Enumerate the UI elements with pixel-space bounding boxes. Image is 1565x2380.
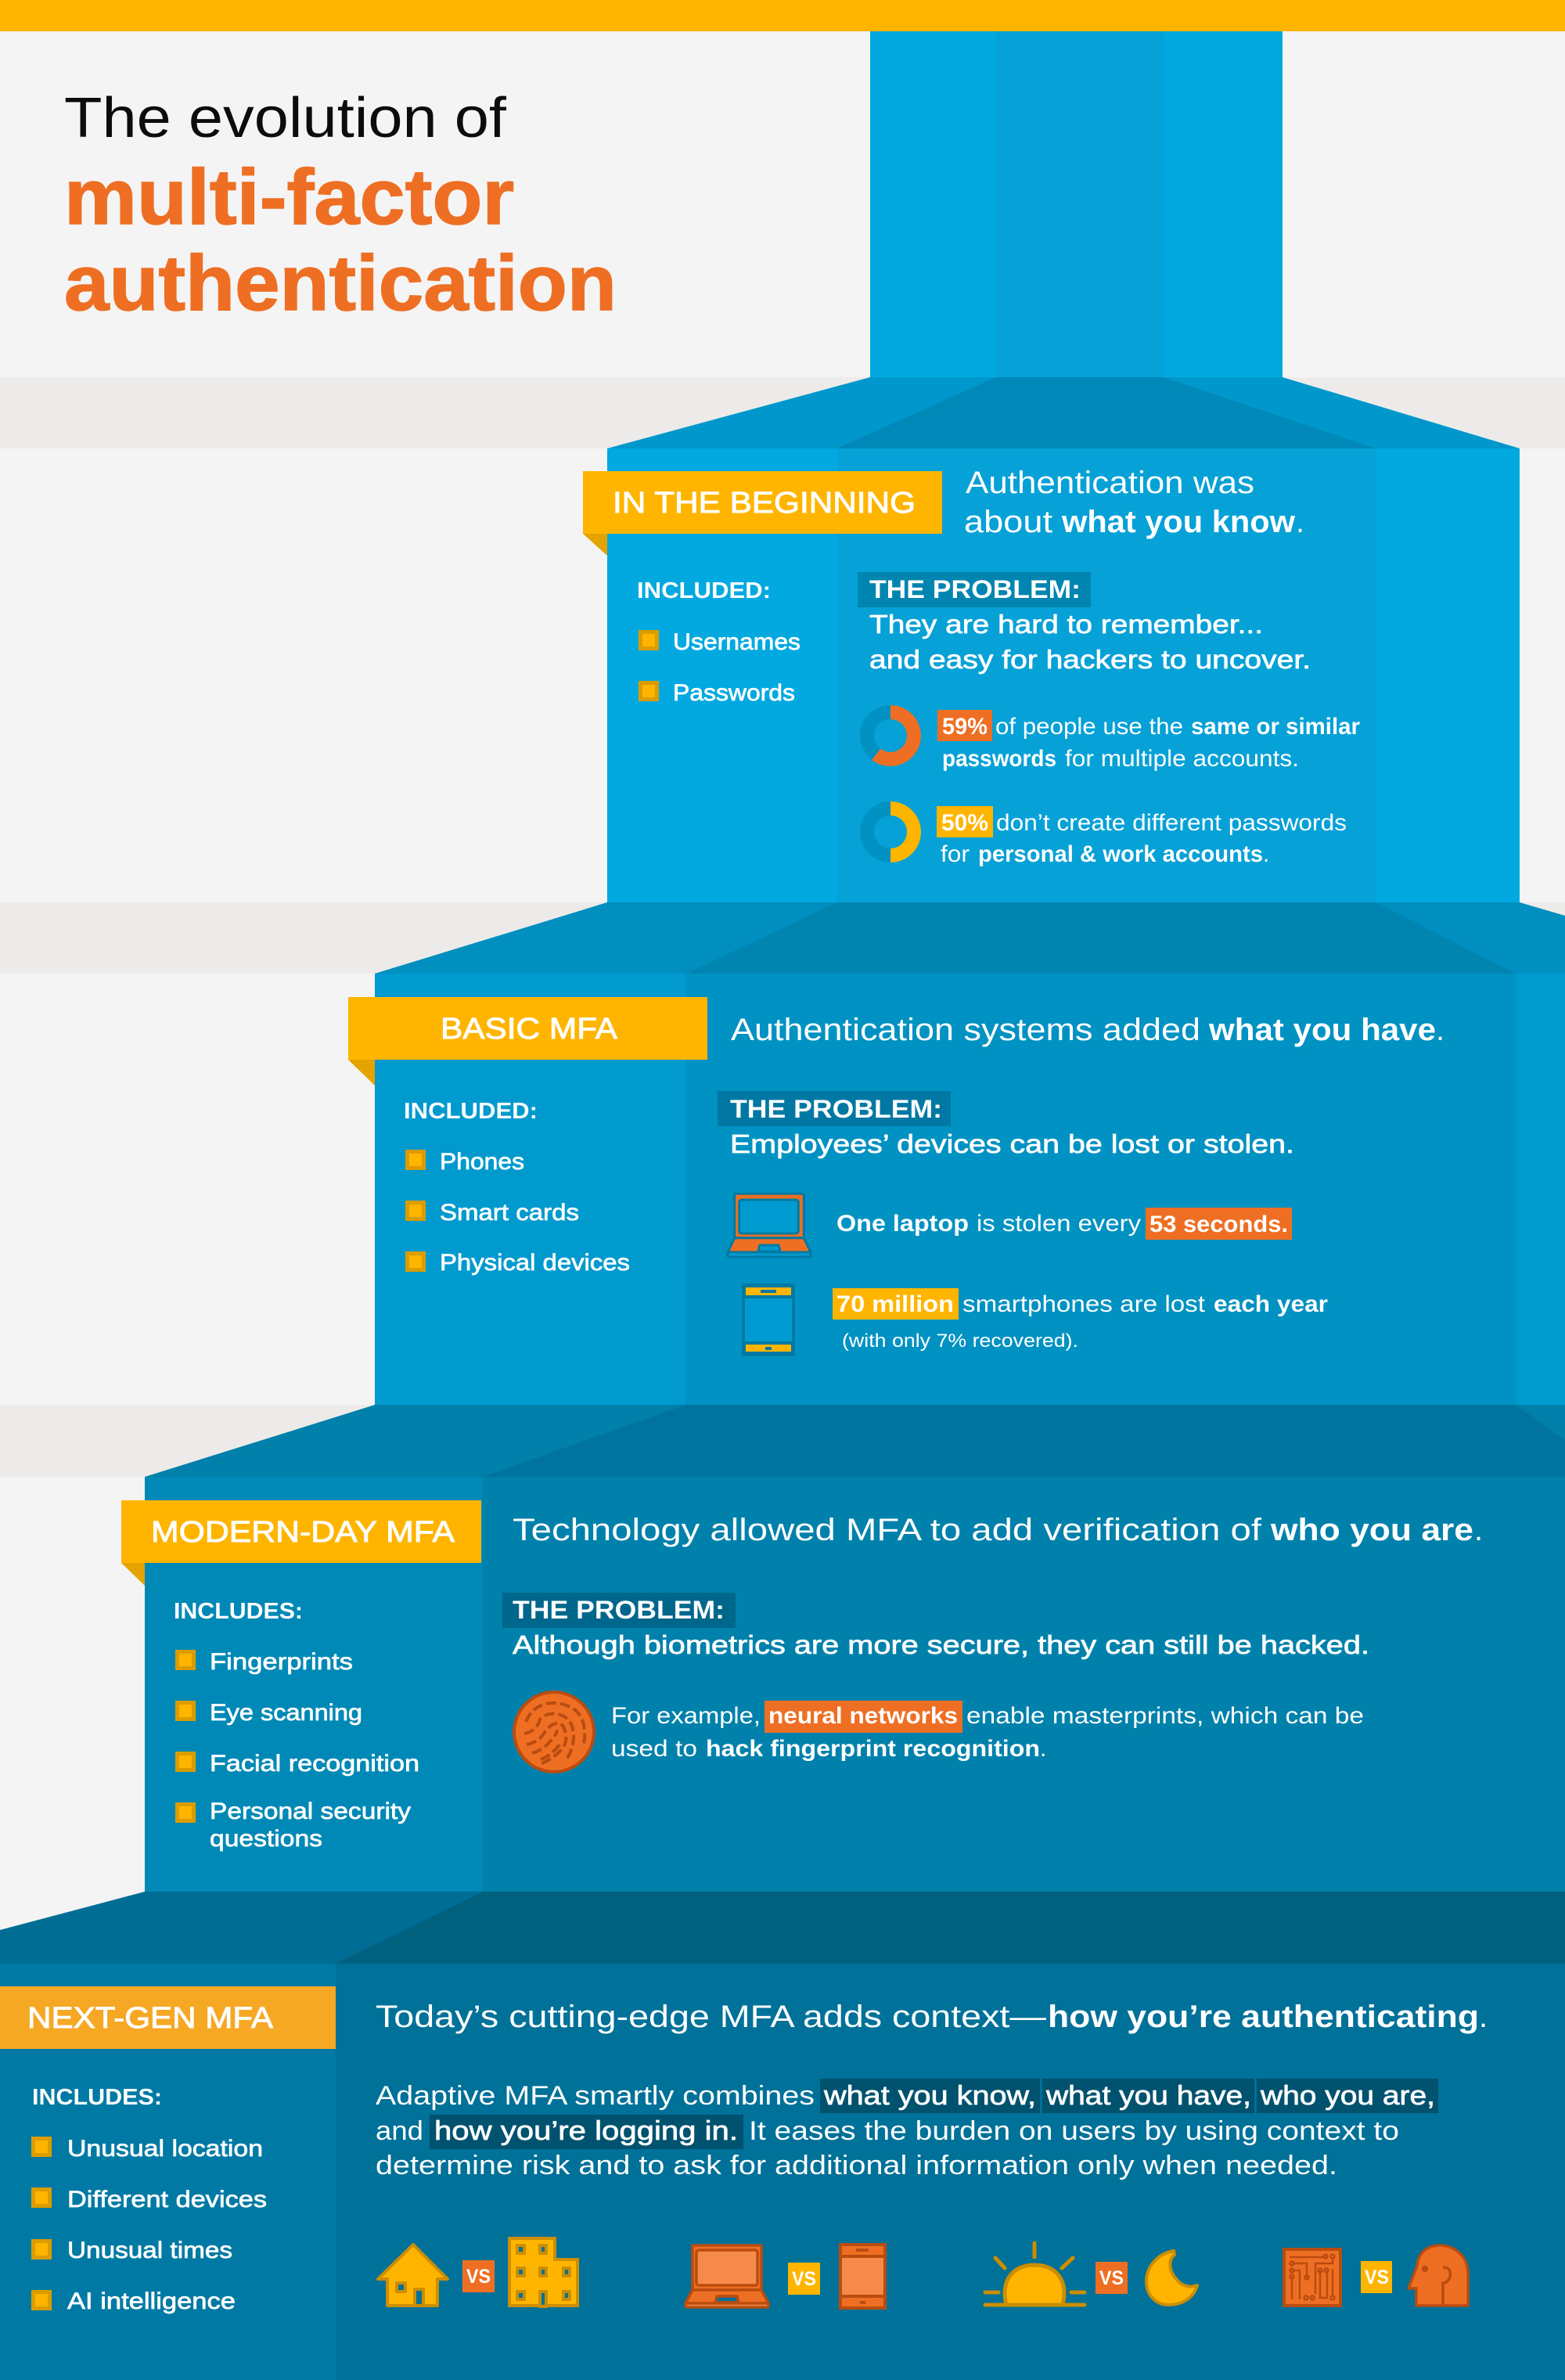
vs badge: [462, 2260, 495, 2292]
stat: one laptop: is stolen every: [977, 1211, 1141, 1237]
paragraph: adaptive MFA: It eases the burden on users by using context to: [749, 2116, 1399, 2146]
tag: modern-day MFA: [121, 1500, 481, 1586]
heading: what you know: .: [1296, 505, 1304, 539]
vs badge: VS: [1099, 2267, 1124, 2289]
paragraph: adaptive MFA: [376, 2079, 1438, 2180]
heading: what you have: what you have: [1208, 1013, 1436, 1047]
list: includes: Unusual location: [67, 2136, 263, 2162]
paragraph: adaptive MFA: what you have,: [1045, 2081, 1251, 2111]
text: neural networks: [611, 1701, 1364, 1762]
vs badge: [1096, 2262, 1128, 2294]
text: neural networks: hack fingerprint recognition: [706, 1736, 1040, 1762]
tag: next-gen MFA: [0, 1986, 336, 2049]
list: includes: AI intelligence: [67, 2288, 236, 2314]
heading: who you are: [513, 1513, 1483, 1547]
list: included: Phones: [440, 1149, 524, 1175]
list: included: Passwords: [673, 680, 795, 706]
heading: how you're authenticating: [376, 2000, 1488, 2034]
list: includes: Eye scanning: [210, 1700, 362, 1726]
vs badge: VS: [1365, 2267, 1389, 2288]
the problem: THE PROBLEM:: [513, 1596, 725, 1624]
heading: who you are: who you are: [1270, 1513, 1473, 1547]
stat: 59%: passwords: [942, 746, 1056, 772]
panel: modern-day MFA: [121, 1405, 1565, 1892]
list: included: Smart cards: [440, 1200, 579, 1226]
the problem: [502, 1593, 1369, 1659]
heading: how you're authenticating: .: [1479, 2000, 1488, 2034]
paragraph: adaptive MFA: determine risk and to ask for additional information only when needed.: [376, 2151, 1337, 2180]
list: included: [404, 1099, 630, 1276]
the problem: [858, 572, 1311, 674]
the problem: THE PROBLEM:: [869, 575, 1081, 603]
the problem: Employees’ devices can be lost or stolen.: [730, 1129, 1294, 1158]
stat: 59%: 59%: [942, 714, 988, 740]
heading: who you are: Technology allowed MFA to add verification of: [513, 1513, 1262, 1547]
vs badge: VS: [466, 2266, 491, 2288]
icon: laptop: [685, 2245, 768, 2307]
paragraph: adaptive MFA: and: [376, 2116, 423, 2146]
paragraph: adaptive MFA: Adaptive MFA smartly combines: [376, 2081, 815, 2111]
stat: 50%: personal & work accounts: [978, 841, 1263, 867]
icon: fingerprint: [514, 1692, 594, 1772]
stat: one laptop: One laptop: [836, 1211, 969, 1237]
the problem: [718, 1091, 1294, 1158]
stat: 50%: .: [1263, 841, 1269, 867]
list: includes: Facial recognition: [210, 1751, 419, 1777]
heading: what you know: about: [964, 505, 1052, 539]
stat: 70 million: smartphones are lost: [962, 1291, 1206, 1317]
list: included: INCLUDED:: [637, 578, 771, 603]
donut chart: 50%: [867, 808, 914, 855]
icon: moon: [1146, 2251, 1197, 2305]
heading: what you know: [964, 466, 1304, 539]
icon: smartphone: [743, 1285, 793, 1355]
tag: modern-day MFA: MODERN-DAY MFA: [151, 1516, 455, 1549]
stat: 50%: [937, 806, 1347, 867]
stat: 59%: for multiple accounts.: [1065, 746, 1299, 772]
title: [64, 87, 617, 327]
list: includes: questions: [210, 1826, 322, 1852]
text: neural networks: enable masterprints, which can be: [966, 1703, 1364, 1729]
paragraph: adaptive MFA: how you’re logging in.: [434, 2116, 738, 2146]
panel: next-gen MFA: [0, 1892, 1565, 2380]
heading: what you know: Authentication was: [966, 466, 1254, 500]
list: includes: INCLUDES:: [174, 1599, 303, 1624]
heading: how you're authenticating: how you’re authenticating: [1048, 2000, 1479, 2034]
list: includes: Unusual times: [67, 2238, 232, 2263]
tag: in the beginning: IN THE BEGINNING: [613, 487, 916, 520]
icon: smartphone: [840, 2245, 885, 2308]
the problem: They are hard to remember...: [869, 610, 1263, 639]
list: included: [637, 578, 800, 706]
list: includes: INCLUDES:: [32, 2085, 162, 2110]
vs badge: [788, 2263, 820, 2295]
stat: 70 million: (with only 7% recovered).: [842, 1330, 1078, 1352]
list: includes: [32, 2085, 267, 2314]
stat: 70 million: [833, 1288, 1328, 1352]
paragraph: adaptive MFA: who you are,: [1260, 2081, 1435, 2111]
vs badge: [1361, 2261, 1392, 2293]
list: includes: Different devices: [67, 2187, 267, 2213]
stat: one laptop: [836, 1208, 1292, 1240]
heading: what you know: what you know: [1061, 505, 1296, 539]
heading: what you have: .: [1436, 1013, 1444, 1047]
icon: house: [378, 2245, 448, 2306]
list: includes: Fingerprints: [210, 1649, 353, 1675]
stat: 59%: [937, 710, 1360, 772]
tag: basic MFA: BASIC MFA: [441, 1013, 618, 1046]
title: authentication: [64, 239, 617, 327]
stat: 50%: don’t create different passwords: [996, 810, 1347, 836]
text: neural networks: .: [1040, 1736, 1046, 1762]
donut chart: 59%: [867, 712, 914, 759]
the problem: THE PROBLEM:: [730, 1095, 942, 1123]
text: neural networks: used to: [611, 1736, 697, 1762]
heading: what you have: [731, 1013, 1444, 1047]
list: included: INCLUDED:: [404, 1099, 538, 1124]
tag: in the beginning: [583, 471, 942, 556]
top column: [870, 31, 1283, 377]
tag: basic MFA: [348, 997, 707, 1086]
text: neural networks: neural networks: [768, 1703, 958, 1729]
list: included: Physical devices: [440, 1250, 630, 1276]
icon: laptop: [728, 1194, 811, 1257]
list: includes: [174, 1599, 419, 1852]
stat: 70 million: each year: [1214, 1291, 1328, 1317]
list: includes: Personal security: [210, 1799, 411, 1824]
icon: head: [1408, 2245, 1468, 2306]
paragraph: adaptive MFA: what you know,: [823, 2081, 1036, 2111]
heading: how you're authenticating: Today’s cutting-edge MFA adds context—: [376, 2000, 1046, 2034]
icon: office building: [509, 2238, 577, 2306]
stat: 59%: of people use the: [995, 714, 1183, 740]
stat: 70 million: 70 million: [836, 1291, 954, 1317]
heading: who you are: .: [1474, 1513, 1483, 1547]
title: multi-factor: [64, 153, 514, 241]
stat: 59%: same or similar: [1191, 714, 1360, 740]
title: The evolution of: [64, 87, 507, 149]
text: neural networks: For example,: [611, 1703, 761, 1729]
tag: next-gen MFA: NEXT-GEN MFA: [27, 2002, 274, 2035]
icon: sun: [985, 2243, 1085, 2305]
icon: circuit board: [1284, 2249, 1340, 2306]
panel: in the beginning: [583, 377, 1520, 902]
heading: what you have: Authentication systems added: [731, 1013, 1200, 1047]
the problem: and easy for hackers to uncover.: [869, 645, 1311, 674]
the problem: Although biometrics are more secure, they can still be hacked.: [513, 1630, 1369, 1659]
stat: one laptop: 53 seconds.: [1149, 1212, 1288, 1237]
vs badge: VS: [792, 2268, 816, 2290]
panel: basic MFA: [348, 902, 1565, 1405]
stat: 50%: for: [941, 841, 970, 867]
list: included: Usernames: [673, 629, 800, 655]
stat: 50%: 50%: [941, 810, 988, 836]
